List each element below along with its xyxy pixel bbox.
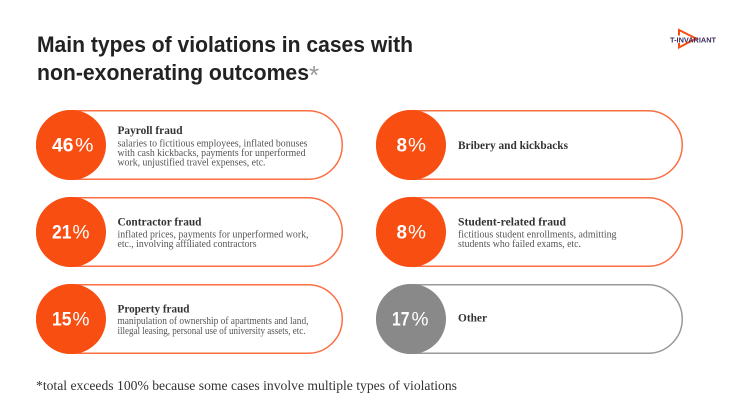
percentage badge: 8%: % <box>408 136 426 156</box>
percentage badge: 17%: 17 <box>392 310 410 330</box>
panel: other <box>376 284 682 354</box>
percentage badge: 8% <box>376 197 446 267</box>
title <box>37 32 413 90</box>
percentage badge: 8% <box>376 110 446 180</box>
percentage badge: 21%: 21 <box>52 222 72 244</box>
title: non-exonerating outcomes <box>37 60 309 85</box>
percentage badge: 46%: 46 <box>52 136 74 156</box>
panel: property fraud <box>36 284 342 354</box>
percentage badge: 17%: % <box>412 310 429 330</box>
title: Main types of violations in cases with <box>37 32 413 57</box>
percentage badge: 21%: % <box>72 222 90 244</box>
text: other: Other <box>458 310 488 324</box>
text: property fraud <box>118 302 308 337</box>
text: property fraud: Property fraud <box>118 302 190 316</box>
percentage badge: 17% <box>376 284 446 354</box>
percentage badge: 15%: % <box>72 310 90 330</box>
percentage badge: 46%: % <box>75 136 94 156</box>
logo wordmark: T-INVARIANT <box>670 38 717 44</box>
text: payroll fraud: Payroll fraud <box>118 123 183 137</box>
text: contractor fraud: inflated prices, payments for unperformed work, <box>118 229 308 240</box>
text: payroll fraud: with cash kickbacks, payments for unperformed <box>118 148 306 159</box>
text: payroll fraud <box>118 123 308 169</box>
percentage badge: 15%: 15 <box>52 310 72 330</box>
text: contractor fraud: Contractor fraud <box>118 214 202 228</box>
text: property fraud: manipulation of ownership of apartments and land, <box>118 316 308 327</box>
percentage badge: 15% <box>36 284 106 354</box>
title: * <box>309 60 319 90</box>
text: contractor fraud: etc., involving affiliated contractors <box>118 239 257 250</box>
percentage badge: 8%: 8 <box>396 136 407 156</box>
text: property fraud: illegal leasing, personal use of university assets, etc. <box>118 326 306 337</box>
percentage badge: 8%: 8 <box>396 222 407 244</box>
icon: logo triangle <box>679 30 696 48</box>
text: student-related fraud <box>458 215 616 250</box>
panel: contractor fraud <box>36 197 342 267</box>
percentage badge: 8%: % <box>408 222 426 244</box>
percentage badge: 21% <box>36 197 106 267</box>
text: payroll fraud: work, unjustified travel expenses, etc. <box>118 158 266 169</box>
text: bribery and kickbacks: Bribery and kickbacks <box>458 138 568 152</box>
text: payroll fraud: salaries to fictitious employees, inflated bonuses <box>118 139 308 150</box>
panel: bribery and kickbacks <box>376 110 682 180</box>
text: student-related fraud: fictitious student enrollments, admitting <box>458 230 616 240</box>
footnote: *total exceeds 100% because some cases involve multiple types of violations <box>36 378 457 393</box>
panel: student-related fraud <box>376 197 682 267</box>
panel: payroll fraud <box>36 110 342 180</box>
text: student-related fraud: students who failed exams, etc. <box>458 239 581 250</box>
text: student-related fraud: Student-related fraud <box>458 215 566 229</box>
percentage badge: 46% <box>36 110 106 180</box>
logo: T-Invariant <box>670 30 717 48</box>
text: contractor fraud <box>118 214 308 250</box>
